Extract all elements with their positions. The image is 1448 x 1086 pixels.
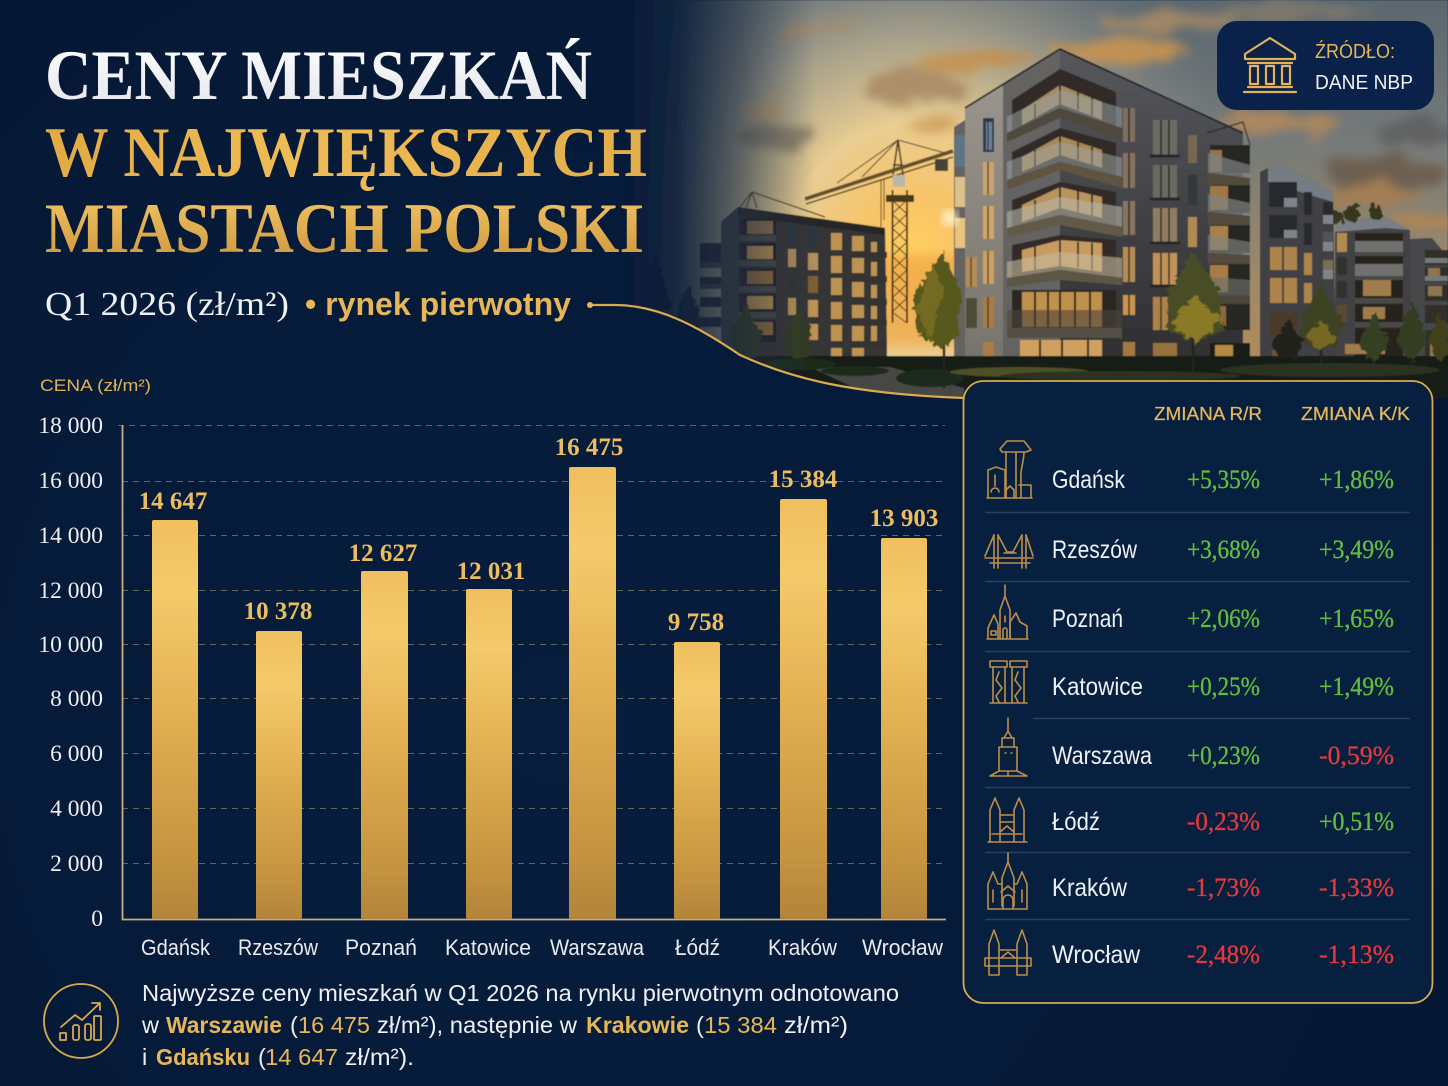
- y axis labels: 10 000: [38, 632, 103, 658]
- icon: Katowice towers: [990, 661, 1027, 703]
- bar: Gdańsk: [152, 520, 198, 919]
- left face windows: [966, 118, 994, 363]
- bar: Rzeszów: [256, 631, 302, 919]
- quarter-on-quarter values: -0,59%: [1319, 741, 1394, 770]
- sun glare: [942, 210, 958, 226]
- rooftop crane on left building: [740, 192, 825, 217]
- category labels: Katowice: [445, 935, 531, 960]
- trees and garden: [640, 250, 1448, 400]
- city names: Kraków: [1052, 874, 1128, 902]
- bars: [152, 467, 927, 919]
- category labels: Wrocław: [862, 935, 943, 960]
- summary text: 16 475: [298, 1012, 370, 1038]
- change table panel: [964, 381, 1432, 1003]
- y axis labels: [38, 413, 103, 932]
- ground floor lobby: [1020, 340, 1102, 365]
- column headers: ZMIANA R/R: [1154, 404, 1262, 424]
- icon: Poznań church: [987, 585, 1028, 639]
- y axis labels: 14 000: [38, 523, 103, 549]
- category labels: Poznań: [345, 935, 417, 960]
- right face windows: [1123, 108, 1197, 365]
- bar values: 10 378: [244, 598, 312, 625]
- balcony stack floor 2: [1007, 128, 1122, 190]
- balcony stack floor 5: [1007, 290, 1122, 338]
- title line: white: CENY MIESZKAŃ: [45, 37, 592, 115]
- icon: Gdańsk crane gate: [987, 441, 1032, 498]
- column headers: ZMIANA K/K: [1301, 404, 1410, 424]
- city names: Poznań: [1052, 605, 1123, 633]
- y axis labels: 2 000: [50, 851, 103, 877]
- summary text: zł/m²), następnie w: [377, 1012, 578, 1038]
- year-on-year values: +0,25%: [1187, 672, 1260, 701]
- summary text: [141, 980, 899, 1070]
- bar: Warszawa: [569, 467, 616, 919]
- sky with clouds: [632, 0, 1448, 400]
- title line: gold: W NAJWIĘKSZYCH: [45, 114, 647, 192]
- y axis labels: 18 000: [38, 413, 103, 439]
- year-on-year values: -1,73%: [1187, 873, 1260, 902]
- summary text: Najwyższe ceny mieszkań w Q1 2026 na rynku pierwotnym odnotowano: [142, 980, 899, 1006]
- axis title: CENA (zł/m²): [40, 376, 151, 395]
- bar values: 12 627: [349, 540, 417, 567]
- summary text: Krakowie: [586, 1012, 689, 1038]
- bar: Poznań: [361, 571, 408, 919]
- summary text: zł/m²).: [345, 1044, 414, 1070]
- bar: Wrocław: [881, 538, 927, 919]
- quarter-on-quarter values: +0,51%: [1319, 807, 1394, 836]
- summary text: zł/m²): [784, 1012, 848, 1038]
- main building: [954, 49, 1440, 372]
- dark conifers at the left: [640, 250, 704, 327]
- y axis labels: 16 000: [38, 468, 103, 494]
- wave: navy lower area with gold edge: [0, 280, 1448, 420]
- bar: Katowice: [466, 589, 512, 919]
- y axis labels: 4 000: [50, 796, 103, 822]
- summary text: w: [141, 1012, 160, 1038]
- source text: ŹRÓDŁO:: [1315, 40, 1395, 63]
- y axis labels: 0: [91, 906, 103, 932]
- city names: Gdańsk: [1052, 466, 1125, 494]
- quarter-on-quarter values: +3,49%: [1319, 535, 1394, 564]
- bar values: 15 384: [769, 466, 838, 493]
- summary text: Warszawie: [166, 1012, 282, 1038]
- quarter-on-quarter values: -1,13%: [1319, 940, 1394, 969]
- y axis labels: 12 000: [38, 578, 103, 604]
- category labels: Warszawa: [550, 935, 645, 960]
- subtitle market: • rynek pierwotny: [305, 286, 571, 322]
- quarter-on-quarter values: [1319, 465, 1394, 969]
- icon: Łódź gate: [988, 798, 1027, 842]
- quarter-on-quarter values: +1,49%: [1319, 672, 1394, 701]
- title line: gold 2: MIASTACH POLSKI: [45, 190, 644, 268]
- summary text: 15 384: [704, 1012, 777, 1038]
- left fade into navy: [632, 0, 830, 400]
- bar values: 14 647: [139, 488, 207, 515]
- left building: [700, 192, 887, 358]
- category labels: Gdańsk: [141, 935, 211, 960]
- year-on-year values: +3,68%: [1187, 535, 1260, 564]
- quarter-on-quarter values: -1,33%: [1319, 873, 1394, 902]
- city names: Katowice: [1052, 673, 1143, 701]
- year-on-year values: +2,06%: [1187, 604, 1260, 633]
- summary text: (: [696, 1012, 704, 1038]
- crane: [805, 140, 953, 323]
- summary: [44, 980, 899, 1070]
- bar values: 12 031: [457, 558, 525, 585]
- summary text: i: [142, 1044, 147, 1070]
- summary text: (: [290, 1012, 298, 1038]
- subtitle period: Q1 2026 (zł/m²): [45, 286, 289, 323]
- balcony stack floor 3: [1007, 182, 1122, 238]
- city names: Rzeszów: [1052, 536, 1138, 564]
- bar chart: [38, 376, 946, 960]
- bar values: 13 903: [870, 505, 938, 532]
- y axis labels: 6 000: [50, 741, 103, 767]
- icon: bank: [1244, 38, 1296, 92]
- category labels: Rzeszów: [238, 935, 318, 960]
- category labels: [141, 935, 943, 960]
- balcony stack floor 4: [1007, 235, 1122, 287]
- column headers: [1154, 404, 1410, 424]
- source text: DANE NBP: [1315, 72, 1413, 94]
- city names: Łódź: [1052, 808, 1100, 836]
- year-on-year values: +5,35%: [1187, 465, 1260, 494]
- category labels: Łódź: [675, 935, 720, 960]
- year-on-year values: -2,48%: [1187, 940, 1260, 969]
- year-on-year values: +0,23%: [1187, 741, 1260, 770]
- mid right wing: [1260, 165, 1336, 365]
- subtitle: [45, 286, 571, 323]
- year-on-year values: -0,23%: [1187, 807, 1260, 836]
- icon: Wrocław bridge towers: [985, 930, 1031, 975]
- year-on-year values: [1187, 465, 1260, 969]
- photo: apartment buildings at sunset with a crane: [632, 0, 1448, 400]
- far right block: [1330, 204, 1448, 365]
- bar values: 9 758: [668, 609, 724, 636]
- bar values: 16 475: [555, 434, 623, 461]
- quarter-on-quarter values: +1,65%: [1319, 604, 1394, 633]
- icon: growth chart: [44, 984, 118, 1058]
- bar values: [139, 434, 938, 636]
- city names: Wrocław: [1052, 941, 1141, 969]
- title: [45, 37, 647, 268]
- summary text: Gdańsku: [156, 1044, 250, 1070]
- city names: Warszawa: [1052, 742, 1152, 770]
- bar: Kraków: [780, 499, 827, 919]
- quarter-on-quarter values: +1,86%: [1319, 465, 1394, 494]
- source text: [1315, 40, 1413, 94]
- icon: Kraków basilica: [988, 853, 1027, 909]
- right balcony stack: [1207, 122, 1250, 365]
- source badge: [1217, 21, 1434, 110]
- category labels: Kraków: [768, 935, 837, 960]
- balcony stack floor 1: [1007, 69, 1122, 142]
- city names: [1052, 466, 1152, 969]
- summary text: (: [258, 1044, 266, 1070]
- bar: Łódź: [674, 642, 720, 919]
- icon: Warszawa palace: [990, 718, 1027, 776]
- y axis labels: 8 000: [50, 686, 103, 712]
- icon: Rzeszów bridge: [985, 535, 1033, 568]
- summary text: 14 647: [265, 1044, 338, 1070]
